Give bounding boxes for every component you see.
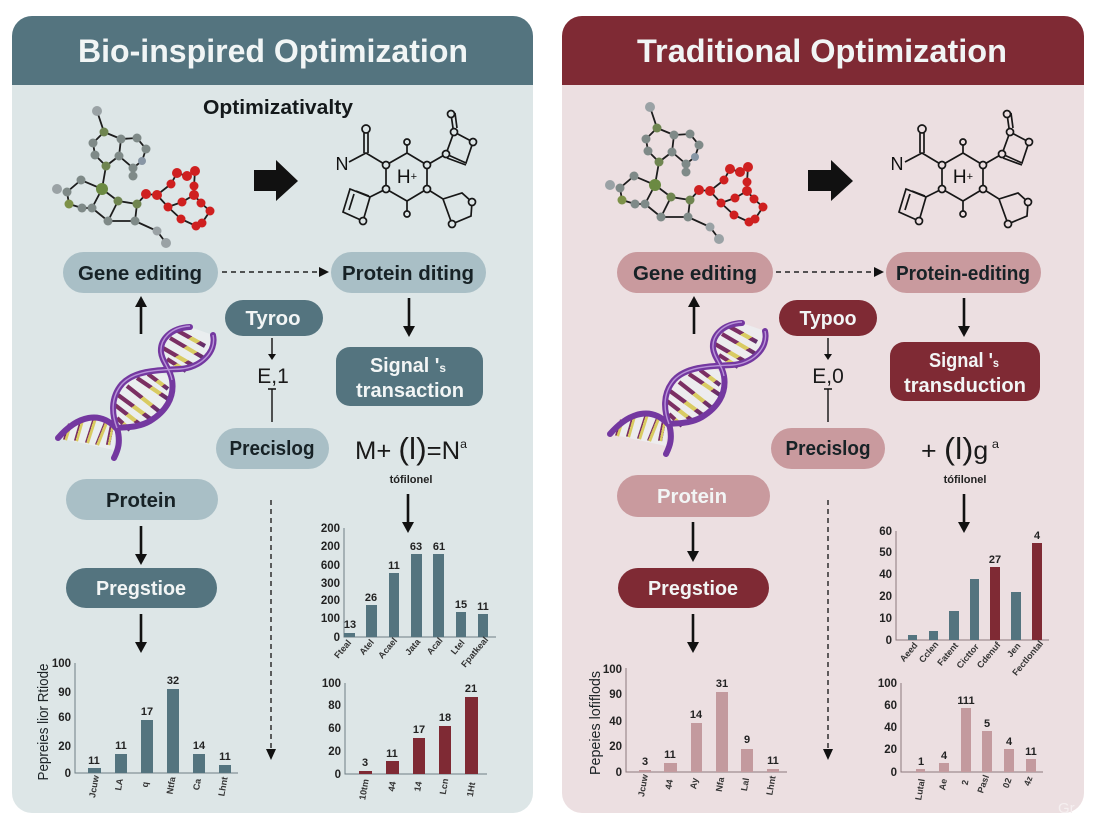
bar chart: left lower right: 44 (386, 781, 398, 792)
arrow: dna to gene editing (135, 296, 147, 334)
bar chart: left lower right: 3 (362, 757, 368, 769)
formula: M+ (l)=N (355, 431, 459, 466)
bar chart: right lower right: 2 (960, 779, 970, 786)
pill: precislog (216, 428, 329, 469)
bar chart: left upper right: Atel (357, 637, 376, 657)
title: Traditional Optimization (637, 33, 1007, 69)
bar chart: right lower left: 11 (664, 749, 676, 761)
bar chart: right lower left: 31 (716, 678, 728, 690)
bar chart: right upper right: Aeed (898, 640, 920, 664)
pill: protein editing (886, 252, 1041, 293)
bar chart: right lower right: 40 (884, 722, 897, 734)
y axis title: Pepeies lofiflods (588, 671, 604, 775)
y axis title: Pepreies lior Rtiode (36, 664, 52, 780)
bar chart: left lower (36, 658, 238, 798)
icon: skeletal molecule: N (336, 154, 348, 174)
pill: precislog: Precislog (230, 438, 314, 460)
bar chart: left lower right: 17 (413, 724, 425, 736)
pill: gene editing: Gene editing (78, 263, 202, 285)
bar chart: left lower: 100 (52, 658, 71, 670)
bar chart: left upper right: Jata (403, 636, 423, 657)
bar chart: right lower right: 100 (878, 678, 897, 690)
bar chart: left lower right: 18 (439, 712, 451, 724)
bar chart: left lower right (322, 678, 487, 801)
bar chart: left upper right: 11 (388, 560, 400, 572)
bar chart: left lower: 90 (58, 687, 71, 699)
arrow: molecule transformation (254, 160, 298, 201)
panel: traditional optimization (562, 16, 1084, 817)
bar chart: right lower right: 1 (918, 756, 924, 768)
bar chart: left upper right: Fteal (332, 638, 353, 660)
bar chart: left lower: 32 (167, 675, 179, 687)
pill: precislog: Precislog (786, 438, 870, 460)
pill: signal transduction (890, 342, 1040, 401)
icon: skeletal molecule: + (967, 171, 973, 183)
dashed arrow: gene to protein (222, 267, 329, 277)
bar chart: right lower left: 100 (603, 664, 622, 676)
panel background (12, 16, 533, 813)
formula (355, 431, 467, 486)
pill: gene editing: Gene editing (633, 263, 757, 285)
arrow: protein to pregstioe (135, 526, 147, 565)
bar chart: right upper right: 0 (886, 635, 892, 647)
bar chart: right lower right: 4 (1006, 736, 1013, 748)
value label: E,0 (812, 365, 844, 388)
bar chart: right upper right (879, 526, 1049, 678)
bar chart: left upper right: 600 (321, 560, 340, 572)
bar chart: left lower: 17 (141, 706, 153, 718)
bar chart: right lower left: Jcuw (636, 773, 650, 797)
bar chart: left upper right: Ltel (449, 638, 467, 656)
pill: protein: Protein (657, 486, 727, 508)
arrow: molecule transformation (808, 160, 853, 201)
dashed arrow: gene to protein (776, 267, 884, 277)
icon: skeletal molecule: H (953, 167, 967, 188)
bar chart: left lower: 0 (65, 768, 71, 780)
bar chart: left lower right: 80 (328, 700, 341, 712)
panel: bio-inspired optimization (12, 16, 533, 813)
arrow: formula to chart (402, 494, 414, 533)
pill: typoo (779, 300, 877, 336)
pill: protein editing: Protein-editing (896, 263, 1030, 285)
pill: signal transaction: Signal 's (370, 355, 446, 377)
bar chart: right lower left: Lhnt (764, 775, 778, 796)
bar chart: right upper right: Fectlontal (1010, 639, 1045, 678)
bar chart: right upper right: 10 (879, 613, 892, 625)
bar chart: right lower right: 02 (1001, 777, 1014, 789)
bar chart: left upper right: 200 (321, 595, 340, 607)
bar chart: left upper right: 63 (410, 541, 422, 553)
arrow: protein to pregstioe (687, 522, 699, 562)
bar chart: right lower right: 111 (957, 695, 975, 707)
arrow: pregstioe to chart (687, 614, 699, 653)
bar chart: left lower: Ca (191, 777, 203, 791)
dashed arrow: precislog to baseline (823, 500, 833, 760)
arrow: precislog to value (824, 389, 832, 422)
watermark: Gr (1058, 800, 1075, 817)
pill: signal transaction (336, 347, 483, 406)
bar chart: left lower: 11 (219, 751, 231, 763)
bar chart: right upper right: 40 (879, 569, 892, 581)
pill: tyroo: Tyroo (246, 308, 300, 330)
formula: tófilonel (944, 474, 986, 486)
formula: + (l)g (921, 431, 987, 466)
bar chart: right lower left: 40 (609, 716, 622, 728)
bar chart: left lower: 11 (115, 740, 127, 752)
bar chart: right upper right: Jen (1005, 641, 1023, 659)
bar chart: right upper right: 50 (879, 547, 892, 559)
bar chart: right lower left: 3 (642, 756, 648, 768)
pill: typoo: Typoo (800, 308, 856, 330)
bar chart: right lower left (588, 664, 787, 797)
arrow: dna to gene editing (688, 296, 700, 334)
arrow: pregstioe to chart (135, 614, 147, 653)
header band (562, 16, 1084, 85)
bar chart: left upper right: 100 (321, 613, 340, 625)
bar chart: left lower: LA (113, 777, 125, 791)
bar chart: left upper right: 26 (365, 592, 377, 604)
bar chart: left lower right: 10tm (357, 778, 371, 801)
bar chart: right lower left: Ay (688, 777, 700, 790)
value label: E,1 (257, 365, 289, 388)
arrow: formula to chart (958, 494, 970, 533)
bar chart: right upper right: 27 (989, 554, 1001, 566)
bar chart: left upper right (321, 523, 496, 669)
bar chart: left lower right: 100 (322, 678, 341, 690)
pill: pregstioe (618, 568, 769, 608)
bar chart: left upper right: 15 (455, 599, 467, 611)
bar chart: right lower right: 4z (1022, 774, 1035, 787)
pill: pregstioe: Pregstioe (96, 578, 186, 600)
bar chart: right lower right: Pasl (975, 774, 991, 794)
icon: skeletal molecule: N (890, 154, 904, 174)
bar chart: left lower: q (140, 781, 150, 788)
bar chart: left lower: 20 (58, 741, 71, 753)
bar chart: right lower left: 14 (690, 709, 703, 721)
bar chart: right lower left: 20 (609, 741, 622, 753)
pill: pregstioe: Pregstioe (648, 578, 738, 600)
bar chart: left lower: Ntfa (165, 775, 178, 795)
bar chart: right lower right: 20 (884, 744, 897, 756)
pill: pregstioe (66, 568, 217, 608)
bar chart: left lower: 11 (88, 755, 100, 767)
arrow: typoo to value (824, 338, 832, 360)
formula: a (988, 437, 999, 451)
bar chart: left upper right: 200 (321, 541, 340, 553)
pill: protein (617, 475, 770, 517)
icon: skeletal molecule (890, 110, 1032, 228)
bar chart: left lower right: 11 (386, 748, 398, 760)
pill: protein (66, 479, 218, 520)
bar chart: left upper right: 0 (334, 632, 340, 644)
bar chart: left upper right: 13 (344, 619, 356, 631)
icon: dna helix (58, 326, 214, 458)
bar chart: left upper right: Fpatkeal (459, 635, 490, 669)
icon: ball and stick molecule (52, 106, 214, 248)
panel background (562, 16, 1084, 813)
bar chart: right upper right: Cdenuf (975, 639, 1003, 670)
bar chart: right upper right: 4 (1034, 530, 1041, 542)
bar chart: left lower right: Lcn (438, 778, 450, 795)
bar chart: left lower: 14 (193, 740, 206, 752)
bar chart: left upper right: 300 (321, 578, 340, 590)
bar chart: right lower left: 0 (616, 767, 622, 779)
bar chart: right upper right: Cclen (917, 639, 940, 665)
pill: gene editing (63, 252, 218, 293)
bar chart: right upper right: Fatent (935, 641, 960, 668)
bar chart: right lower left: Nfa (714, 775, 726, 792)
bar chart: left lower: 60 (58, 712, 71, 724)
icon: skeletal molecule: + (411, 171, 417, 183)
icon: dna helix (610, 322, 766, 454)
bar chart: right lower right: 4 (941, 750, 948, 762)
bar chart: left lower right: 0 (335, 769, 341, 781)
bar chart: right lower left: 9 (744, 734, 750, 746)
bar chart: left upper right: 200 (321, 523, 340, 535)
arrow: protein editing to signal (958, 298, 970, 337)
pill: protein diting (331, 252, 486, 293)
bar chart: right lower right: Lutal (913, 778, 927, 801)
bar chart: right lower right (878, 678, 1043, 801)
formula (921, 431, 999, 486)
header band (12, 16, 533, 85)
title: Bio-inspired Optimization (78, 33, 468, 69)
dashed arrow: precislog to baseline (266, 500, 276, 760)
bar chart: right lower right: 5 (984, 718, 990, 730)
pill: gene editing (617, 252, 773, 293)
bar chart: left upper right: 61 (433, 541, 445, 553)
bar chart: left upper right: Acal (425, 636, 445, 657)
pill: protein: Protein (106, 490, 176, 512)
bar chart: right lower left: 90 (609, 689, 622, 701)
bar chart: right upper right: Cicttor (955, 641, 981, 670)
bar chart: left lower right: 20 (328, 746, 341, 758)
icon: skeletal molecule (336, 110, 476, 228)
bar chart: right upper right: 60 (879, 526, 892, 538)
bar chart: right lower left: 44 (663, 779, 675, 790)
bar chart: left upper right: Acael (376, 636, 399, 660)
formula: tófilonel (390, 474, 432, 486)
pill: precislog (771, 428, 885, 469)
pill: signal transduction: Signal 's (929, 350, 999, 372)
icon: skeletal molecule: H (397, 167, 411, 188)
pill: signal transaction: transaction (356, 380, 464, 402)
bar chart: right lower left: Lal (739, 777, 751, 792)
bar chart: left lower: Jcuw (87, 774, 101, 798)
pill: signal transduction: transduction (904, 375, 1026, 397)
icon: ball and stick molecule (605, 102, 768, 244)
bar chart: left lower: Lhnt (216, 776, 230, 797)
arrow: tyroo to value (268, 338, 276, 360)
bar chart: right lower right: 11 (1025, 746, 1037, 758)
bar chart: right lower right: 60 (884, 700, 897, 712)
bar chart: left upper right: 11 (477, 601, 489, 613)
arrow: protein diting to signal (403, 298, 415, 337)
bar chart: left lower right: 21 (465, 683, 477, 695)
arrow: precislog to value (268, 389, 276, 422)
bar chart: right upper right: 20 (879, 591, 892, 603)
formula: a (460, 437, 467, 451)
bar chart: left lower right: 1Ht (465, 781, 477, 797)
pill: tyroo (225, 300, 323, 336)
pill: protein diting: Protein diting (342, 263, 474, 285)
bar chart: left lower right: 14 (412, 781, 424, 792)
subheading: Optimizativalty (203, 97, 354, 119)
bar chart: left lower right: 60 (328, 723, 341, 735)
bar chart: right lower left: 11 (767, 755, 779, 767)
bar chart: right lower right: Ae (937, 778, 949, 791)
bar chart: right lower right: 0 (891, 767, 897, 779)
